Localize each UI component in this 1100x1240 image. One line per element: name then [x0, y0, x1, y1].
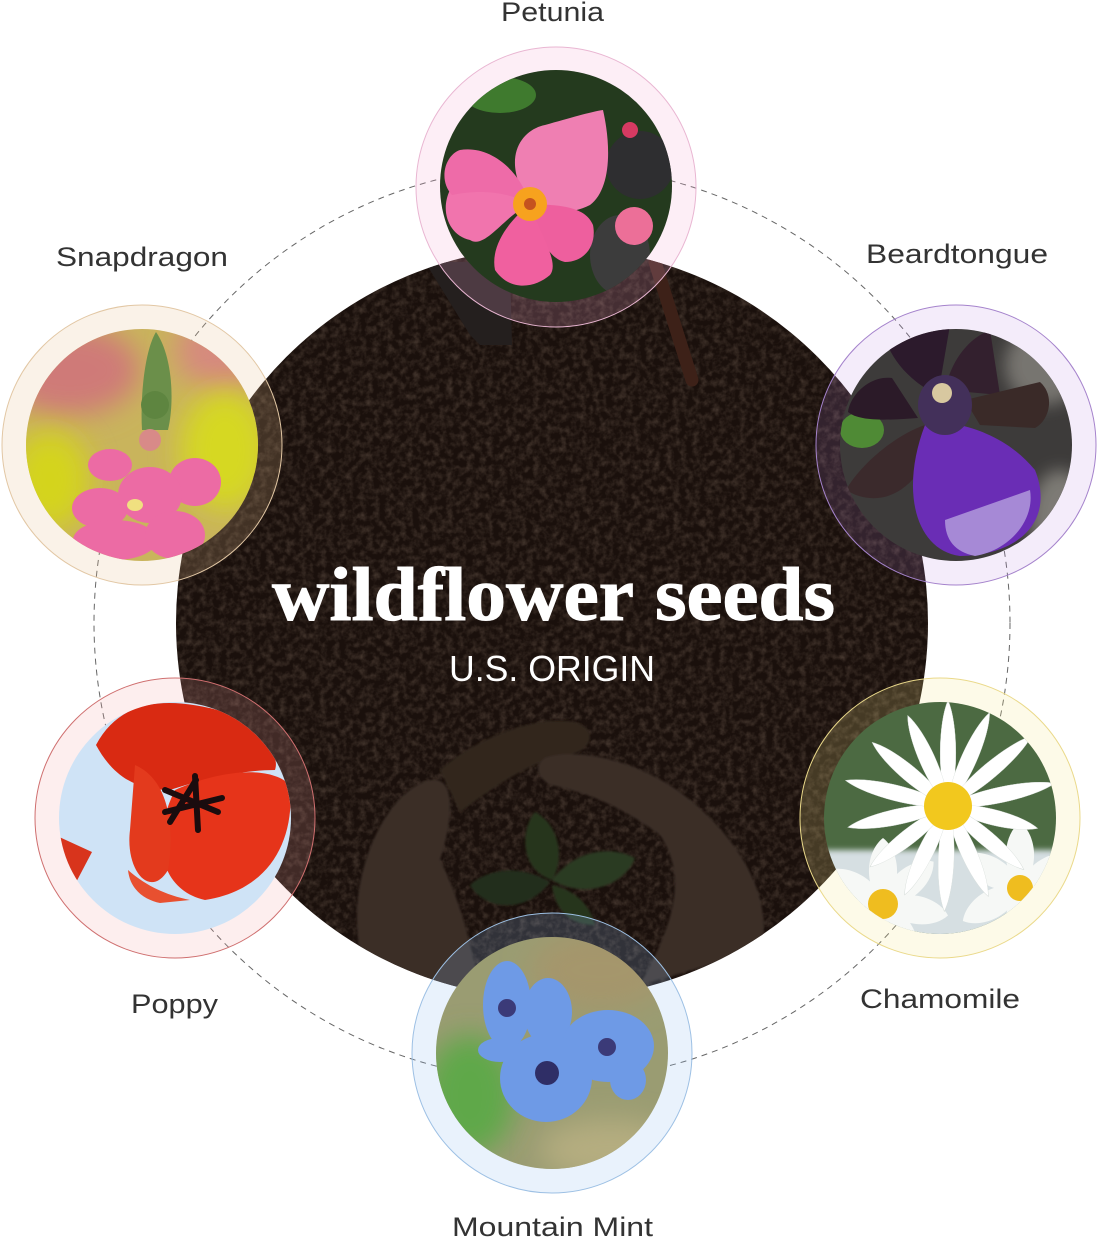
- cupped hands: [357, 721, 764, 990]
- flower: Poppy: [35, 678, 315, 958]
- title: wildflower seeds: [272, 553, 835, 637]
- flower: Beardtongue: [816, 305, 1096, 585]
- title: wildflower seeds: wildflower: [272, 553, 634, 637]
- flower: Chamomile: [800, 678, 1084, 971]
- label: Chamomile: Chamomile: [860, 984, 1020, 1014]
- label: Beardtongue: Beardtongue: [866, 239, 1048, 269]
- label: Poppy: Poppy: [131, 989, 219, 1019]
- flower: Petunia: [416, 47, 696, 327]
- soil circle background: [176, 247, 928, 999]
- label: Snapdragon: Snapdragon: [56, 242, 228, 272]
- flower: Snapdragon: [0, 305, 282, 585]
- subtitle: U.S. origin: U.S. ORIGIN: [449, 648, 655, 689]
- flower: Mountain Mint: [412, 913, 692, 1193]
- trowel shape: [425, 262, 512, 345]
- gardening tool handle: [655, 262, 692, 380]
- petals: [515, 110, 608, 212]
- title: wildflower seeds: seeds: [655, 553, 835, 637]
- dashed connecting ring: [94, 165, 1010, 1081]
- seedling: [525, 812, 559, 880]
